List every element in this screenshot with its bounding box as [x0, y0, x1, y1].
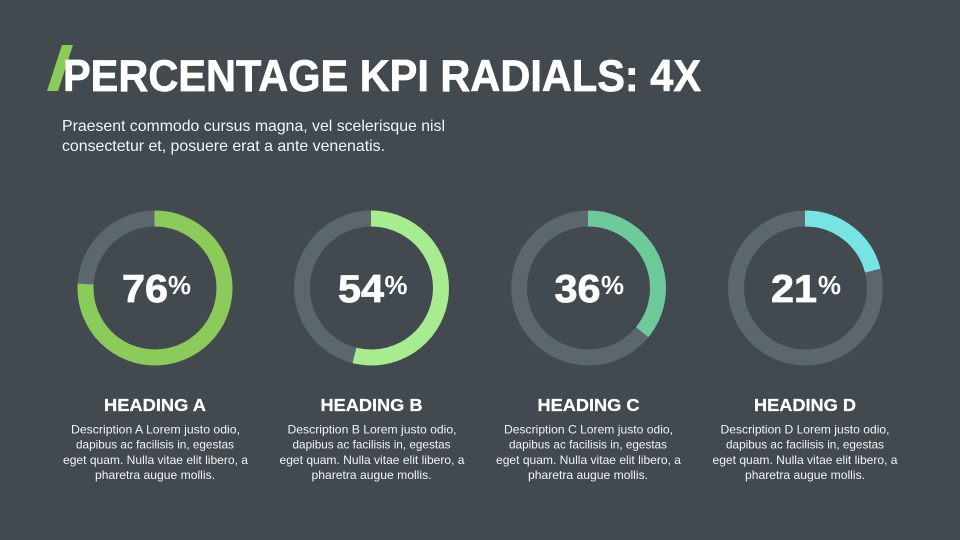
panel: KPI B — [280, 218, 465, 482]
value: 36%: % — [601, 270, 624, 300]
description D: eget quam. Nulla vitae elit libero, a — [712, 453, 898, 467]
description A: dapibus ac facilisis in, egestas — [76, 438, 234, 452]
description C: dapibus ac facilisis in, egestas — [509, 438, 667, 452]
heading B: HEADING B — [320, 395, 422, 415]
description A: Description A Lorem justo odio, — [71, 422, 240, 436]
description C: Description C Lorem justo odio, — [504, 422, 673, 436]
description D: pharetra augue mollis. — [745, 468, 865, 482]
description B: eget quam. Nulla vitae elit libero, a — [280, 453, 465, 467]
description D — [712, 422, 898, 482]
heading D: HEADING D — [754, 395, 856, 415]
description C — [496, 422, 681, 482]
description B — [280, 422, 465, 482]
subtitle text block: Praesent commodo cursus magna, vel scelerisque nisl — [62, 118, 445, 135]
icon: green slash accent — [47, 45, 73, 91]
description D: Description D Lorem justo odio, — [720, 422, 890, 436]
subtitle text block: consectetur et, posuere erat a ante venenatis. — [62, 138, 385, 155]
value: 54%: % — [384, 270, 408, 300]
panel: KPI A — [63, 218, 248, 482]
heading C: HEADING C — [538, 395, 640, 415]
description A: pharetra augue mollis. — [95, 468, 215, 482]
description A: eget quam. Nulla vitae elit libero, a — [63, 453, 248, 467]
description B: Description B Lorem justo odio, — [288, 422, 456, 436]
title: PERCENTAGE KPI RADIALS: 4X — [63, 52, 701, 101]
value: 21% — [771, 268, 841, 311]
heading A: HEADING A — [104, 395, 206, 415]
radial chart: 76% — [86, 218, 224, 358]
value: 76%: % — [168, 270, 191, 300]
value: 76% — [122, 268, 191, 311]
description D: dapibus ac facilisis in, egestas — [726, 438, 884, 452]
panel: KPI D — [712, 218, 898, 482]
subtitle text block — [62, 118, 445, 155]
value: 54% — [338, 268, 408, 311]
description B: pharetra augue mollis. — [312, 468, 432, 482]
radial chart: 21% — [736, 218, 875, 358]
value: 36%: 36 — [554, 268, 600, 311]
value: 36% — [554, 268, 624, 311]
panel: KPI C — [496, 218, 681, 482]
description C: pharetra augue mollis. — [528, 468, 648, 482]
radial chart: 54% — [302, 218, 441, 358]
value: 21%: % — [818, 270, 841, 300]
value: 54%: 54 — [338, 268, 384, 311]
description A — [63, 422, 248, 482]
description C: eget quam. Nulla vitae elit libero, a — [496, 453, 681, 467]
description B: dapibus ac facilisis in, egestas — [292, 438, 450, 452]
radial chart: 36% — [519, 218, 658, 358]
value: 21%: 21 — [771, 268, 817, 311]
value: 76%: 76 — [122, 268, 168, 311]
